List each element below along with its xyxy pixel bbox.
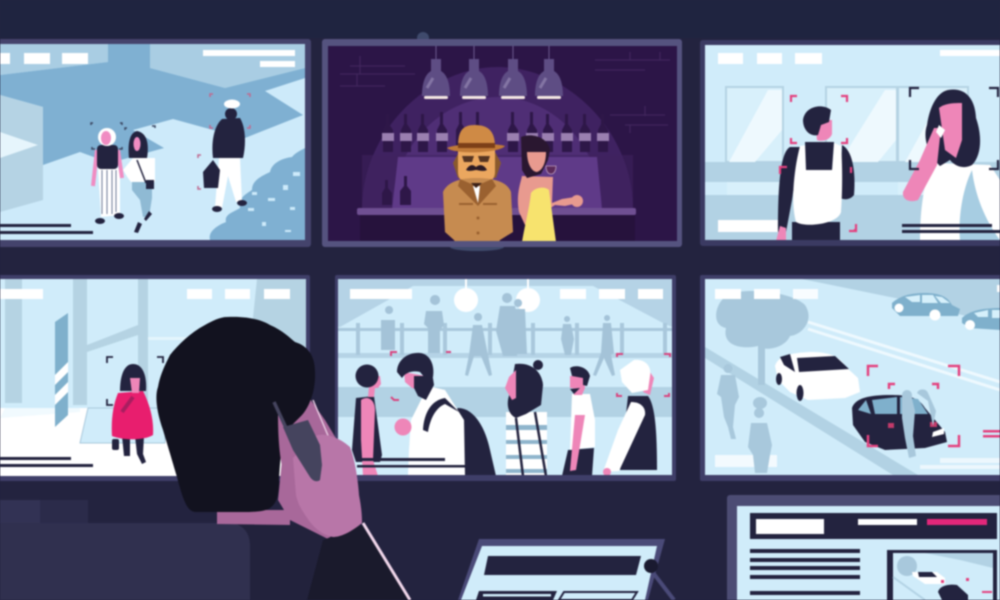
- timeline lines: [0, 457, 93, 467]
- tracking brackets: [868, 366, 959, 446]
- tracking brackets: [107, 357, 163, 405]
- character: detective: [443, 125, 513, 243]
- passengers: [902, 389, 936, 458]
- operator at desk: [0, 317, 411, 600]
- person: woman with shoulder bag: [123, 131, 155, 233]
- bottles: [382, 112, 609, 205]
- desk strip: [0, 500, 88, 523]
- report header: [750, 513, 997, 539]
- person: older man with vest: [603, 360, 657, 476]
- cheek: [278, 392, 340, 540]
- background silhouettes: [381, 293, 615, 376]
- neck: [217, 510, 290, 525]
- jacket: [0, 523, 250, 600]
- panel: shop front monitor: [700, 40, 1000, 246]
- dark car with passengers: [852, 389, 947, 458]
- hair: [156, 317, 315, 512]
- hand: [293, 435, 362, 537]
- label bars: [0, 50, 295, 67]
- stand arm: [654, 574, 674, 600]
- tracking brackets: [91, 94, 250, 189]
- content box: [476, 591, 557, 600]
- content box: [559, 592, 637, 600]
- tree: [716, 291, 809, 409]
- person: man in white t-shirt: [562, 366, 595, 476]
- white car: [775, 352, 860, 401]
- person: woman in striped trousers: [93, 128, 124, 224]
- stand hinge: [644, 559, 658, 573]
- pedestrians: [717, 364, 772, 473]
- bar counter: [360, 215, 635, 241]
- ear: [278, 415, 286, 470]
- globe lights: [454, 279, 540, 312]
- headline bar: [484, 556, 641, 575]
- phone antenna: [274, 402, 287, 430]
- timeline lines: [0, 224, 93, 234]
- panel: bar monitor: [322, 32, 682, 251]
- parked blue car: [962, 308, 1000, 330]
- curb: [705, 347, 918, 475]
- striped pole: [55, 313, 68, 427]
- report text lines: [750, 549, 860, 595]
- timeline lines: [357, 458, 465, 468]
- person: man with white backpack: [776, 106, 854, 241]
- panel: lobby monitor: [0, 275, 310, 481]
- architecture: [5, 279, 306, 405]
- jacket shadow: [236, 524, 330, 600]
- label bars: [350, 289, 663, 299]
- person: man with cap and bag: [203, 100, 247, 212]
- tracking brackets: [780, 88, 998, 231]
- character: woman in yellow dress: [518, 135, 583, 242]
- dome backdrop: [362, 67, 633, 210]
- person: woman in pink coat: [112, 364, 153, 464]
- pink marker: [983, 430, 1000, 438]
- person: short-haired woman: [352, 364, 382, 476]
- white light edge: [313, 400, 332, 445]
- rug: [80, 408, 165, 443]
- person: woman on the phone: [903, 90, 1000, 240]
- sleeve: [307, 525, 411, 600]
- windows: [726, 87, 968, 162]
- panel: street traffic monitor: [700, 275, 1000, 481]
- parked blue car: [892, 293, 960, 320]
- person: bearded man with backpack: [394, 353, 496, 476]
- railing: [338, 323, 672, 355]
- panel: crowd monitor: [335, 275, 676, 481]
- timeline lines: [902, 224, 1000, 233]
- bush: [210, 148, 305, 240]
- sleeve edge light: [363, 523, 410, 600]
- report monitor: [727, 495, 1000, 600]
- label bars: [0, 289, 290, 299]
- person: woman with hair bun: [505, 360, 547, 476]
- tracking brackets: [391, 352, 670, 400]
- chair back highlight: [0, 500, 40, 523]
- pendant lamps: [422, 46, 563, 99]
- brick outlines: [340, 52, 670, 133]
- phone: [283, 420, 322, 481]
- label bars: [715, 285, 1000, 469]
- label bars: [718, 50, 1000, 232]
- report thumbnail: [887, 550, 997, 600]
- panel: street monitor: [0, 39, 311, 247]
- road stripes: [808, 322, 1000, 390]
- tablet on stand: [458, 539, 674, 600]
